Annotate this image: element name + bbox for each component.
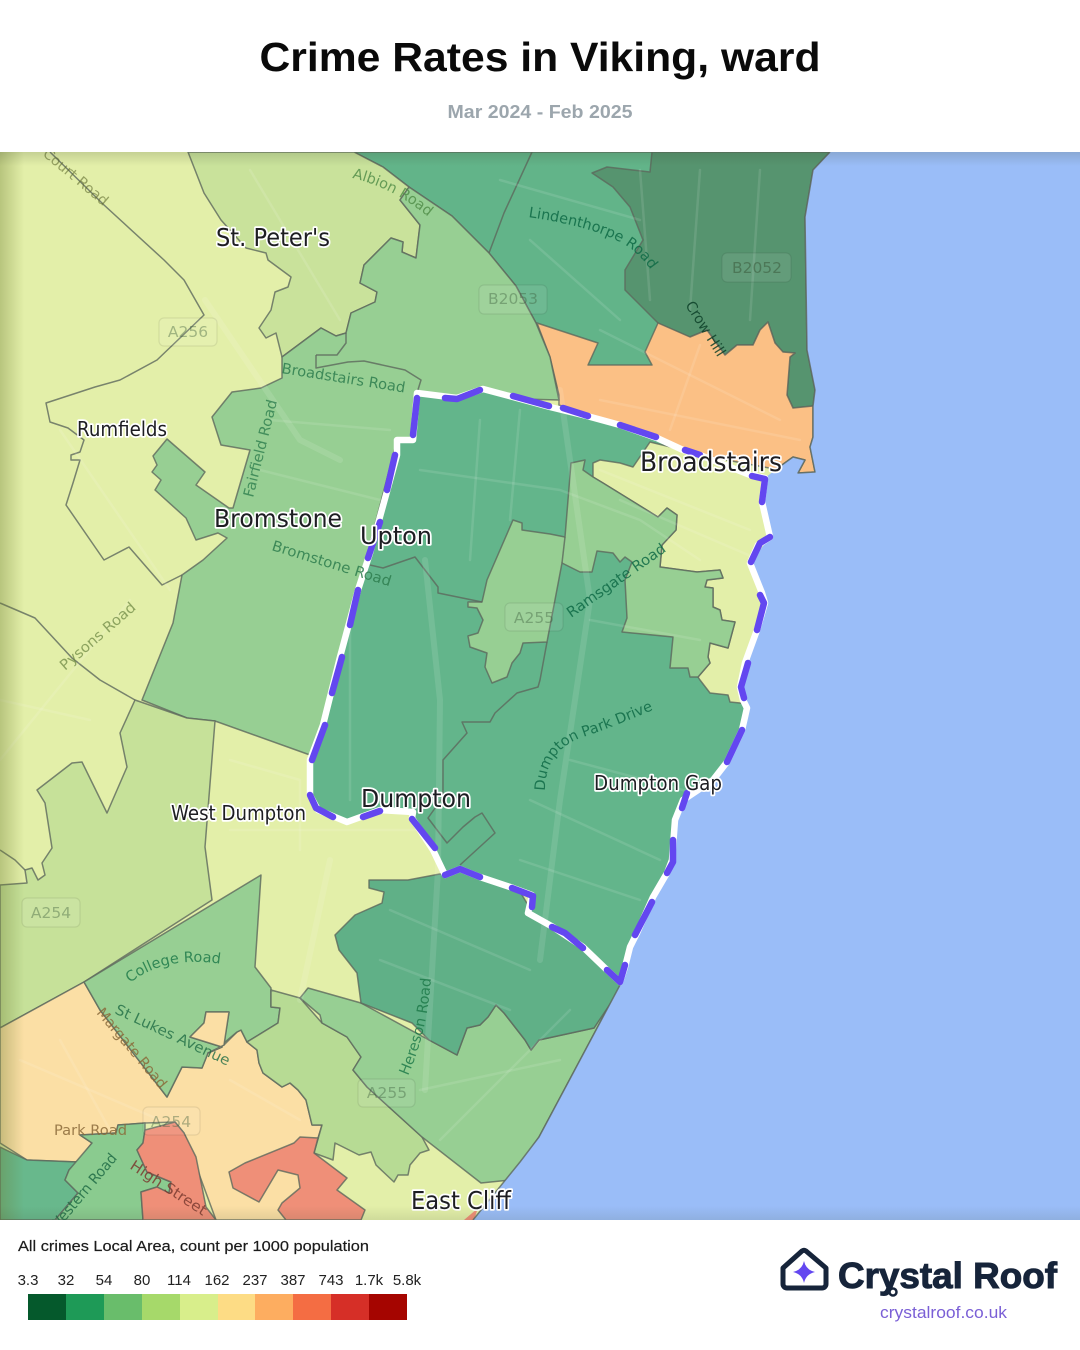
icon: key dot on y (890, 1288, 896, 1296)
region: Viking ward green (310, 389, 770, 982)
legend tick labels (18, 1272, 422, 1289)
region: cream Margate (0, 982, 322, 1220)
region: darkest green north-east (592, 152, 830, 408)
website url: crystalroof.co.uk (880, 1304, 1008, 1322)
road labels: Broadstairs Road (280, 361, 406, 397)
place labels: Dumpton Gap (594, 771, 722, 795)
road labels: High Street (127, 1158, 210, 1219)
road shields: A254 (151, 1113, 191, 1131)
road shields: A255 (367, 1084, 407, 1102)
minor streets (0, 170, 800, 1140)
logo: Crystal Roof (783, 1250, 1058, 1322)
subtitle date range: Mar 2024 - Feb 2025 (448, 101, 632, 122)
place labels: Rumfields (77, 417, 167, 441)
place labels: St. Peter's (216, 223, 330, 252)
green interior boundaries (0, 152, 565, 870)
road labels: Crow Hill (682, 299, 728, 360)
region: north green (354, 152, 830, 406)
region: ward pale yellow east (593, 442, 780, 705)
legend tick labels: 54 (96, 1272, 112, 1289)
region: East Cliff mid green (300, 985, 620, 1183)
road shields: A255 (514, 609, 554, 627)
legend tick labels: 743 (318, 1272, 344, 1289)
header background (0, 0, 1080, 152)
place labels: Bromstone (214, 504, 342, 533)
coastline (473, 152, 830, 1220)
road labels: Ramsgate Road (564, 541, 669, 621)
legend tick labels: 5.8k (393, 1272, 422, 1289)
road labels: Western Road (47, 1151, 121, 1235)
region: green bottom-left (0, 1147, 78, 1220)
place labels (77, 223, 782, 1215)
ward boundary blue dashes (310, 390, 770, 982)
place labels: Broadstairs (640, 447, 782, 478)
road labels: Bromstone Road (270, 539, 393, 590)
logo wordmark: Crystal Roof (838, 1255, 1058, 1296)
legend tick labels: 387 (280, 1272, 306, 1289)
legend tick labels: 1.7k (355, 1272, 384, 1289)
legend tick labels: 80 (134, 1272, 150, 1289)
region: dark green south (335, 862, 625, 1055)
map edge shading (0, 152, 1080, 1220)
place labels: Upton (360, 522, 432, 550)
legend colour scale (28, 1294, 407, 1320)
road shields: B2052 (732, 259, 782, 277)
road labels: Margate Road (93, 1005, 169, 1092)
region: ward mid green centre (468, 460, 735, 683)
place labels: Dumpton (361, 784, 471, 813)
road labels: Lindenthorpe Road (530, 206, 659, 268)
legend tick labels: 114 (167, 1272, 191, 1289)
region: orange Broadstairs (537, 322, 815, 478)
legend tick labels: 32 (58, 1272, 74, 1289)
road labels: Park Road (54, 1123, 127, 1139)
title: Crime Rates in Viking, ward (260, 34, 820, 80)
region: salmon High Street (137, 1122, 216, 1220)
region: salmon shoreline sliver (464, 1208, 478, 1220)
road labels: Hereson Road (398, 978, 431, 1074)
road shields (22, 253, 791, 1135)
footer background (0, 1220, 1080, 1350)
road labels: Fairfield Road (241, 398, 281, 499)
region: green High Street (55, 1123, 171, 1220)
road shields: A254 (31, 904, 71, 922)
road labels: College Road (126, 952, 220, 981)
road labels: Pysons Road (57, 600, 139, 674)
legend tick labels: 162 (204, 1272, 230, 1289)
ward boundary white line (310, 389, 770, 982)
road labels: St Lukes Avenue (112, 1002, 232, 1069)
region: Bromstone mid green (142, 187, 559, 755)
legend tick labels: 237 (242, 1272, 268, 1289)
region: salmon east (229, 1137, 365, 1220)
region: St Peter's light green (188, 152, 420, 357)
legend tick labels: 3.3 (18, 1272, 38, 1289)
road labels (39, 146, 728, 1235)
region: College Road mid green (84, 875, 280, 1097)
legend (18, 1238, 422, 1320)
place labels: West Dumpton (171, 801, 306, 825)
sea (473, 152, 1080, 1220)
road labels: Dumpton Park Drive (534, 704, 652, 790)
road labels: Albion Road (352, 168, 434, 216)
region: cream notch (190, 1012, 229, 1053)
region: western light green (0, 700, 215, 1028)
region: light green south (247, 990, 429, 1182)
road shields: B2053 (488, 290, 538, 308)
icon: house with star (783, 1250, 826, 1288)
road shields: A256 (168, 323, 208, 341)
place labels: East Cliff (411, 1186, 512, 1215)
legend title: All crimes Local Area, count per 1000 population (18, 1238, 369, 1255)
road labels: Court Road (39, 146, 111, 209)
